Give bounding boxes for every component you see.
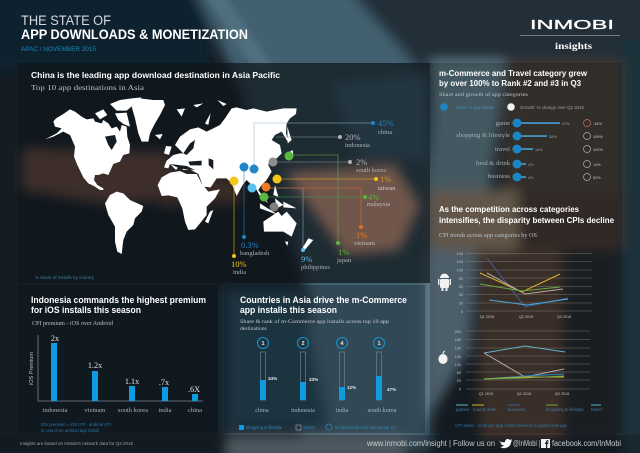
chart: category share and growth: 47% <box>562 122 570 126</box>
heading: competition <box>439 204 614 225</box>
line chart: android CPI: 140 <box>457 252 463 256</box>
subheading: m-commerce: destinations <box>240 326 267 332</box>
subheading: share and growth: Share and growth of app categories <box>439 91 528 98</box>
note: iOS premium: in cost of an android app install <box>41 428 99 433</box>
chart: m-commerce share by country: china <box>255 407 269 414</box>
chart: category share and growth: 26% <box>549 135 557 139</box>
legend: m-commerce: shopping & lifestyle <box>246 425 283 430</box>
legend: CPI categories: food & drink <box>473 407 497 412</box>
heading: iOS premium <box>31 295 206 315</box>
legend: CPI categories: games <box>456 407 470 412</box>
title: APAC / NOVEMBER 2015 <box>21 46 96 53</box>
map labels: 4% <box>368 192 379 202</box>
map labels: 0.3% <box>241 240 259 250</box>
chart: category share and growth: business <box>488 173 510 180</box>
logo: InMobi insights: INMOBI <box>530 17 614 32</box>
subheading: m-commerce: Share & rank of m-Commerce app installs across top 10 app <box>240 318 389 325</box>
line chart: iOS CPI: 160 <box>455 346 461 350</box>
chart: m-commerce share by country: india <box>336 407 348 414</box>
map labels: indonesia <box>345 142 370 149</box>
title: THE STATE OF <box>21 13 111 28</box>
panel: CPI trends <box>430 190 622 433</box>
legend: CPI categories: shopping & lifestyle <box>546 407 584 412</box>
legend: m-commerce: m-commerce rank among top 10 <box>335 425 396 430</box>
chart: m-commerce share by country: 34% <box>268 376 277 381</box>
heading: m-Commerce and Travel: m-Commerce and Travel category grew <box>439 68 587 78</box>
footer links <box>366 439 621 448</box>
line chart: android CPI: 40 <box>459 293 463 297</box>
line chart: iOS CPI: 200 <box>455 330 461 334</box>
line chart: android CPI: 60 <box>459 285 463 289</box>
icon: twitter <box>499 439 512 448</box>
panel: m-commerce <box>224 285 425 433</box>
line chart: android CPI <box>457 252 592 319</box>
chart: m-commerce share by country: 4 <box>340 341 344 347</box>
map heading: China is the leading app download destination in Asia Pacific <box>31 70 280 80</box>
icon: android <box>438 274 451 291</box>
map labels: vietnam <box>354 240 375 247</box>
legend: category: Share of app installs <box>456 105 494 110</box>
chart: category share and growth: -34% <box>593 122 602 126</box>
line chart: android CPI: Q3 2015 <box>557 315 571 319</box>
bar chart: iOS premium: india <box>158 407 172 414</box>
map subheading: Top 10 app destinations in Asia <box>31 83 145 92</box>
map markers <box>230 121 378 258</box>
map labels: india <box>233 269 246 276</box>
line chart: iOS CPI: 0 <box>459 388 461 392</box>
heading: m-commerce: app installs this season <box>240 305 337 315</box>
map labels: 2% <box>356 157 367 167</box>
bar chart: iOS premium <box>29 334 203 414</box>
map labels: japan <box>336 257 352 264</box>
heading: competition: As the competition across categories <box>439 204 579 214</box>
legend: m-commerce: others <box>303 425 315 430</box>
line chart: iOS CPI: 140 <box>455 355 461 359</box>
map labels: bangladesh <box>240 250 270 257</box>
legend: CPI categories: travel <box>591 407 602 412</box>
chart: category share and growth: 4% <box>528 176 534 180</box>
chart: category share and growth: 100% <box>593 148 603 152</box>
heading: m-Commerce and Travel <box>439 68 587 88</box>
bar chart: iOS premium: .6X <box>188 385 200 394</box>
chart: category share and growth: 4% <box>528 163 534 167</box>
icon: apple <box>438 351 448 364</box>
panel: map <box>18 63 430 283</box>
legend: m-commerce <box>239 424 396 430</box>
chart: category share and growth: 52% <box>593 176 601 180</box>
panel: category growth <box>430 63 622 190</box>
heading: iOS premium: Indonesia commands the highest premium <box>31 295 206 305</box>
line chart: android CPI: Q1 2015 <box>480 315 494 319</box>
map labels: 1% <box>380 174 391 184</box>
bar chart: iOS premium: indonesia <box>43 407 68 414</box>
bar chart: iOS premium: 2x <box>51 334 59 343</box>
chart: category share and growth: 14% <box>593 163 601 167</box>
map note: % share of installs by country <box>35 275 95 280</box>
note: iOS premium: iOS premium = iOS CPI - android CPI <box>41 422 111 427</box>
map labels: philippines <box>301 264 330 271</box>
line chart: iOS CPI: 180 <box>455 338 461 342</box>
line chart: android CPI: 20 <box>459 302 463 306</box>
title <box>21 13 248 53</box>
title: APP DOWNLOADS & MONETIZATION <box>21 27 248 42</box>
legend: category: Growth: % change over Q2 2015 <box>520 105 585 110</box>
map labels: 9% <box>301 254 312 264</box>
logo: InMobi insights <box>520 17 620 52</box>
subheading: m-commerce <box>240 318 389 332</box>
line chart: iOS CPI <box>455 330 590 396</box>
chart: m-commerce share by country: 12% <box>347 385 356 390</box>
heading: m-commerce <box>240 295 407 315</box>
bar chart: iOS premium: 1.1x <box>125 377 139 386</box>
subheading: CPI premium: CPI premium - iOS over Android <box>32 321 113 327</box>
chart: category share and growth: 109% <box>593 135 603 139</box>
chart: category share and growth: travel <box>495 146 510 153</box>
legend: CPI categories <box>456 405 602 412</box>
footer facebook url: facebook.com/InMobi <box>552 439 621 448</box>
chart: m-commerce share by country: indonesia <box>291 407 315 414</box>
chart: m-commerce share by country: south korea <box>368 407 397 414</box>
map labels: 1% <box>356 230 367 240</box>
subheading: CPI trends: CPI trends across app categories by OS <box>439 233 537 239</box>
map labels <box>231 118 396 276</box>
note: CPI: CPI Index - Cost per app install indexed to global average <box>455 423 568 428</box>
bar chart: iOS premium: china <box>188 407 202 414</box>
chart: m-commerce share by country: 1 <box>377 341 381 347</box>
line chart: android CPI: 80 <box>459 277 463 281</box>
map labels: china <box>378 129 392 136</box>
line chart: iOS CPI: Q2 2015 <box>517 392 531 396</box>
world map <box>45 97 313 254</box>
bar chart: iOS premium: .7x <box>159 378 169 387</box>
map labels: south korea <box>356 167 386 174</box>
footer strip <box>0 435 640 453</box>
line chart: iOS CPI: Q1 2015 <box>479 392 493 396</box>
chart: m-commerce share by country: 47% <box>387 387 396 392</box>
chart: category share and growth <box>456 118 603 182</box>
note: iOS premium <box>41 422 111 433</box>
line chart: android CPI: Q2 2015 <box>519 315 533 319</box>
map labels: 45% <box>378 118 394 128</box>
chart: m-commerce share by country: 33% <box>309 377 318 382</box>
chart: category share and growth: shopping & lifestyle <box>456 132 510 139</box>
line chart: android CPI: 100 <box>457 268 463 272</box>
line chart: android CPI: 120 <box>457 260 463 264</box>
bar chart: iOS premium: 1.2x <box>88 361 102 370</box>
chart: m-commerce share by country <box>255 338 397 414</box>
chart: m-commerce share by country: 2 <box>301 341 305 347</box>
panel: iOS premium <box>18 285 218 433</box>
callout lines <box>234 123 376 256</box>
bar chart: iOS premium: vietnam <box>85 407 105 414</box>
chart: category share and growth: food & drink <box>476 160 511 167</box>
legend: CPI categories: business <box>508 407 526 412</box>
line chart: iOS CPI: 100 <box>455 363 461 367</box>
logo: InMobi insights: insights <box>555 42 592 52</box>
map labels: 20% <box>345 132 361 142</box>
footer handle: @InMobi | <box>513 439 540 448</box>
line chart: iOS CPI: 20 <box>457 379 461 383</box>
footer note: Insights are based on InMobi's network data for Q3 2015 <box>20 441 133 446</box>
legend: category <box>440 103 585 111</box>
heading: iOS premium: for iOS installs this season <box>31 305 141 315</box>
map labels: taiwan <box>378 185 396 192</box>
bar chart: iOS premium: south korea <box>118 407 148 414</box>
photo detail: hands behind map <box>22 72 428 255</box>
icon: facebook <box>541 439 550 448</box>
map labels: 1% <box>338 247 349 257</box>
chart: m-commerce share by country: 1 <box>261 341 265 347</box>
map labels: malaysia <box>367 201 390 208</box>
heading: competition: intensifies, the disparity between CPIs decline <box>439 215 614 225</box>
line chart: android CPI: 0 <box>461 310 463 314</box>
bar chart: iOS premium: iOS Premium <box>29 352 35 385</box>
footer links: www.inmobi.com/insight | Follow us on <box>366 439 495 448</box>
chart: category share and growth: 14% <box>535 148 543 152</box>
heading: m-Commerce and Travel: by over 100% to Rank #2 and #3 in Q3 <box>439 78 581 88</box>
heading: m-commerce: Countries in Asia drive the m-Commerce <box>240 295 407 305</box>
line chart: iOS CPI: 60 <box>457 371 461 375</box>
chart: category share and growth: game <box>496 120 510 127</box>
map labels: 10% <box>231 259 247 269</box>
line chart: iOS CPI: Q3 2015 <box>555 392 569 396</box>
